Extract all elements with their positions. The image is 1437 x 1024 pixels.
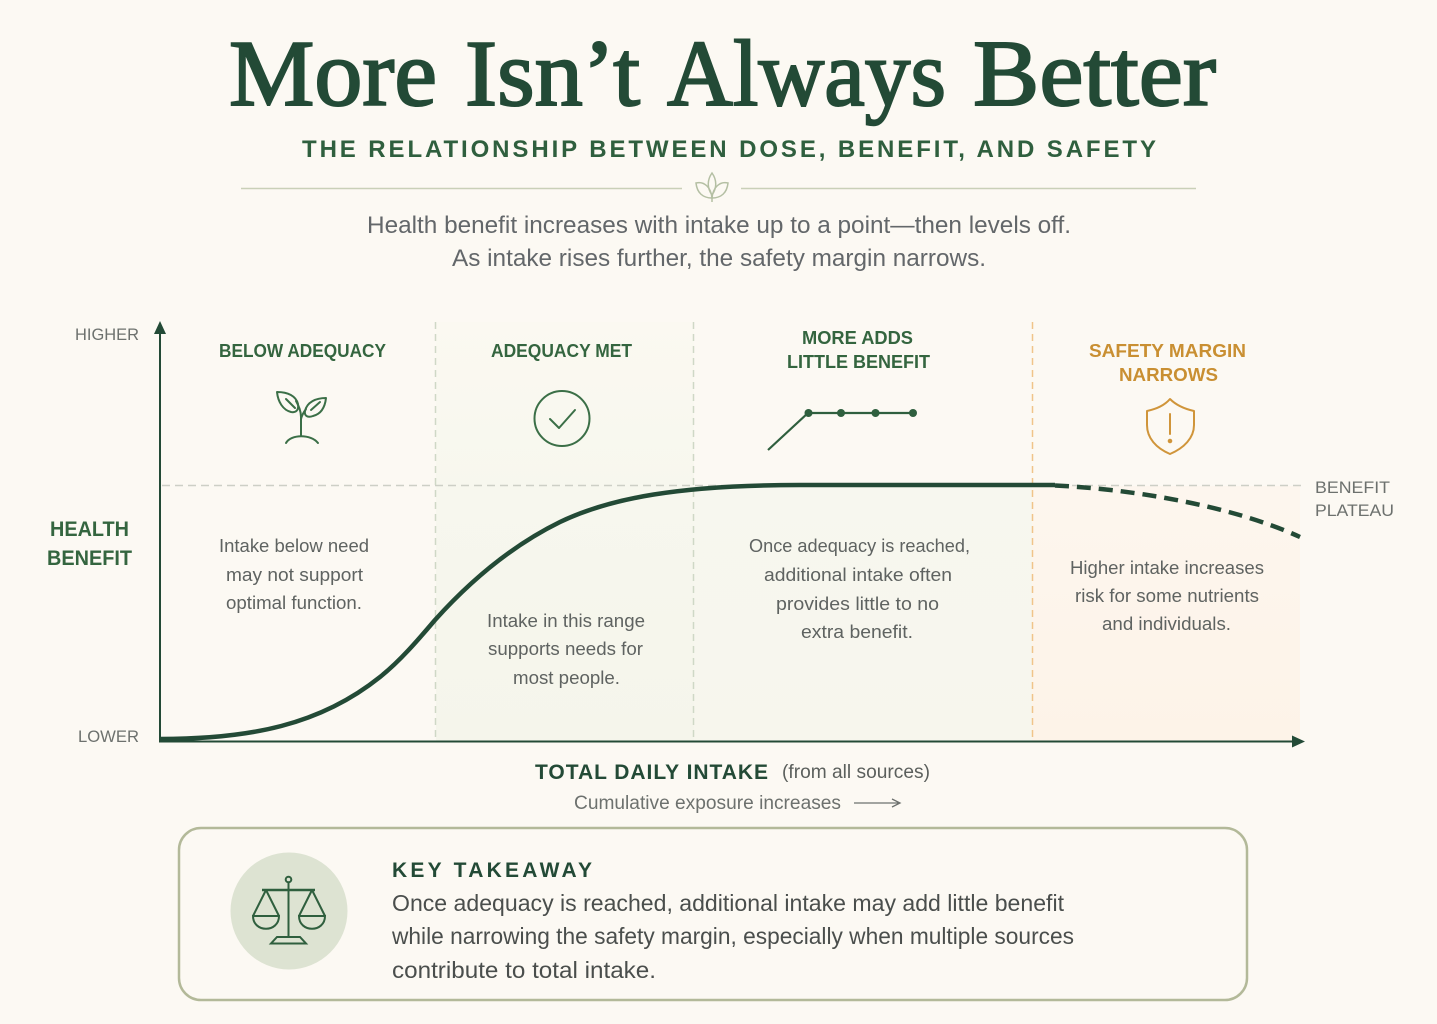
- panel: below adequacy: [219, 341, 386, 613]
- plateau label: [1315, 479, 1394, 520]
- panel: more adds little benefit: [749, 328, 970, 642]
- y axis: [154, 321, 166, 742]
- panel: more adds little benefit: additional intake often: [764, 564, 952, 585]
- zone: safety margin background: [1032, 486, 1300, 741]
- chart: [47, 321, 1394, 748]
- panel: adequacy met: Intake in this range: [487, 610, 645, 631]
- panel: safety margin narrows: [1070, 341, 1264, 634]
- divider with leaf icon: [241, 173, 1196, 202]
- panel: more adds little benefit: Once adequacy is reached,: [749, 535, 970, 556]
- zone: little benefit background: [694, 486, 1032, 741]
- title: Isn’t: [465, 22, 640, 126]
- panel: safety margin narrows: Higher intake increases: [1070, 557, 1264, 578]
- subtitle: THE RELATIONSHIP BETWEEN DOSE, BENEFIT, AND SAFETY: [302, 136, 1156, 163]
- panel: adequacy met: [487, 341, 645, 688]
- benefit curve dashed: [1055, 486, 1300, 537]
- plateau label: BENEFIT: [1315, 479, 1390, 497]
- panel: safety margin narrows: risk for some nutrients: [1075, 585, 1259, 606]
- panel: adequacy met: most people.: [513, 667, 620, 688]
- y axis labels: HIGHER: [75, 326, 139, 344]
- intro text: Health benefit increases with intake up to a point—then levels off.: [367, 212, 1071, 239]
- icon: warning shield: [1147, 399, 1194, 454]
- panel: more adds little benefit: MORE ADDS: [802, 328, 913, 348]
- panel: below adequacy: may not support: [226, 564, 363, 585]
- x axis title: TOTAL DAILY INTAKE: [535, 761, 768, 784]
- icon: plateau line: [768, 409, 917, 450]
- cumulative exposure note with arrow: Cumulative exposure increases: [574, 793, 841, 814]
- panel: safety margin narrows: NARROWS: [1119, 365, 1218, 385]
- panel: safety margin narrows: SAFETY MARGIN: [1089, 341, 1246, 361]
- intro text: As intake rises further, the safety margin narrows.: [452, 245, 986, 272]
- panel: adequacy met: ADEQUACY MET: [491, 341, 632, 361]
- x axis title: (from all sources): [782, 761, 930, 783]
- icon: check circle: [534, 391, 590, 446]
- panel: safety margin narrows: and individuals.: [1102, 613, 1231, 634]
- y axis labels: BENEFIT: [47, 547, 132, 570]
- icon: sprout: [277, 392, 326, 443]
- y axis labels: [47, 326, 139, 746]
- panel: more adds little benefit: extra benefit.: [801, 621, 913, 642]
- takeaway text: contribute to total intake.: [392, 957, 656, 983]
- plateau label: PLATEAU: [1315, 502, 1394, 520]
- title: [229, 22, 1216, 126]
- panel: below adequacy: BELOW ADEQUACY: [219, 341, 386, 361]
- title: More: [229, 22, 437, 126]
- benefit curve solid: [160, 485, 1055, 739]
- x axis: [159, 736, 1305, 748]
- panel: below adequacy: Intake below need: [219, 535, 369, 556]
- plateau reference line: [162, 484, 1302, 486]
- takeaway text: Once adequacy is reached, additional intake may add little benefit: [392, 890, 1064, 916]
- icon: balance scale: [230, 852, 348, 970]
- y axis labels: HEALTH: [50, 518, 129, 541]
- panel: more adds little benefit: provides little to no: [776, 593, 939, 614]
- title: Always: [667, 22, 946, 126]
- x axis title: [535, 761, 930, 784]
- panel: below adequacy: optimal function.: [226, 592, 362, 613]
- panel: adequacy met: supports needs for: [488, 638, 643, 659]
- panel: more adds little benefit: LITTLE BENEFIT: [787, 352, 930, 372]
- zone: adequacy met background: [436, 322, 694, 741]
- title: Better: [973, 22, 1216, 126]
- takeaway text: [391, 890, 1074, 983]
- takeaway heading: KEY TAKEAWAY: [392, 859, 592, 882]
- intro text: [367, 212, 1071, 272]
- panel: key takeaway: [179, 828, 1247, 1000]
- takeaway text: while narrowing the safety margin, especially when multiple sources: [391, 923, 1074, 949]
- y axis labels: LOWER: [78, 728, 139, 746]
